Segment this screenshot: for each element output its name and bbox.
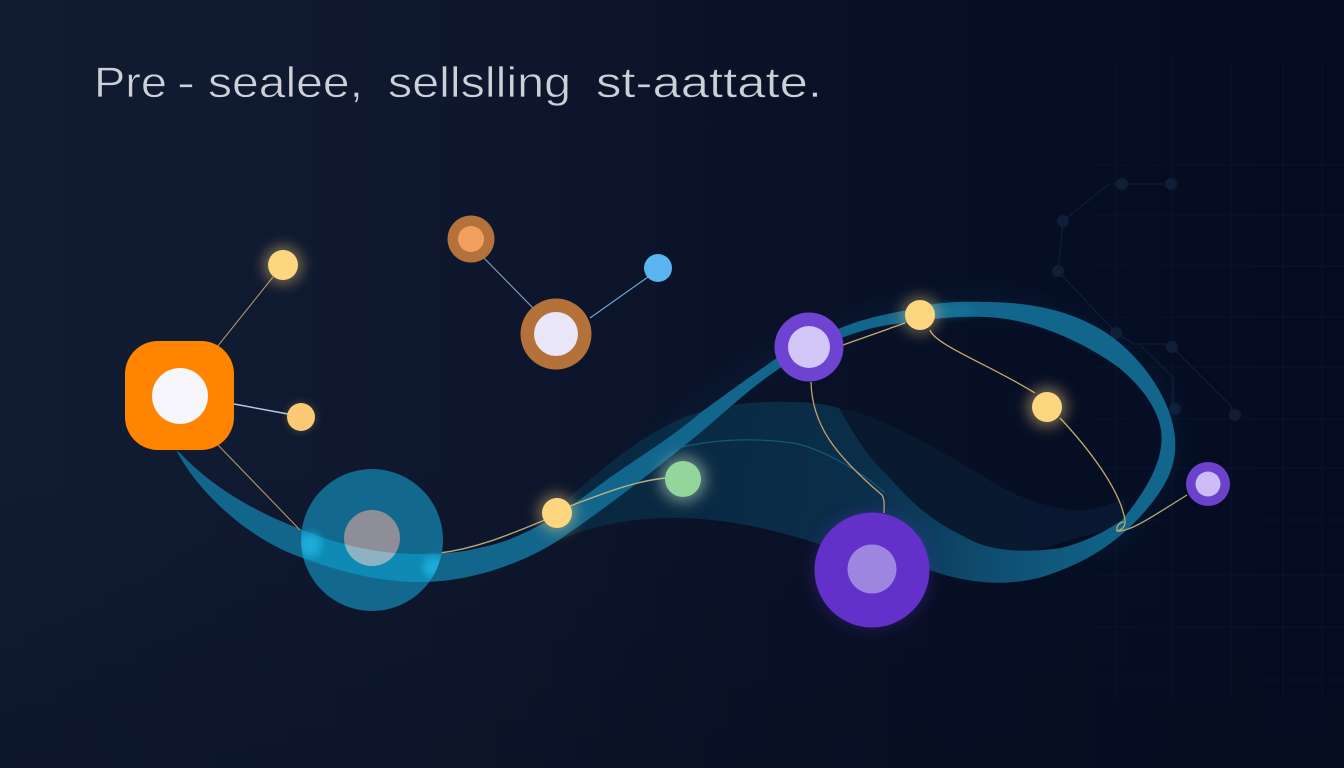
node: brown large bbox=[520, 298, 592, 370]
node: yellow on ribbon bbox=[538, 494, 576, 532]
node: blue bbox=[644, 254, 672, 282]
node: orange square bbox=[125, 341, 234, 450]
node: yellow ribbon top bbox=[901, 296, 939, 334]
main ribbon bbox=[176, 302, 1175, 582]
ribbon glow bbox=[640, 302, 1174, 557]
node: yellow top left bbox=[264, 246, 302, 284]
ribbon highlight near yellow node bbox=[915, 305, 975, 317]
node: brown small bbox=[448, 216, 494, 262]
title: sellslling bbox=[388, 59, 571, 107]
node: yellow small bbox=[286, 402, 316, 432]
node: green bbox=[660, 456, 706, 502]
title: sealee, bbox=[208, 59, 363, 107]
node: purple ribbon bbox=[774, 312, 844, 382]
node: teal translucent bbox=[295, 469, 450, 611]
dim wave band bbox=[559, 402, 1137, 583]
connectors bbox=[217, 258, 1187, 553]
node: purple small bbox=[1186, 462, 1230, 506]
very dim wave area bbox=[839, 408, 1125, 560]
title bbox=[94, 59, 822, 107]
title: st-aattate. bbox=[596, 59, 822, 107]
faint circuit network bbox=[1052, 178, 1241, 421]
node: yellow inner bbox=[1027, 387, 1067, 427]
thin teal line bbox=[678, 440, 885, 493]
title: Pre bbox=[94, 59, 167, 107]
background grid bbox=[1095, 60, 1344, 700]
node: purple large bbox=[812, 510, 932, 630]
title: - bbox=[177, 59, 195, 107]
